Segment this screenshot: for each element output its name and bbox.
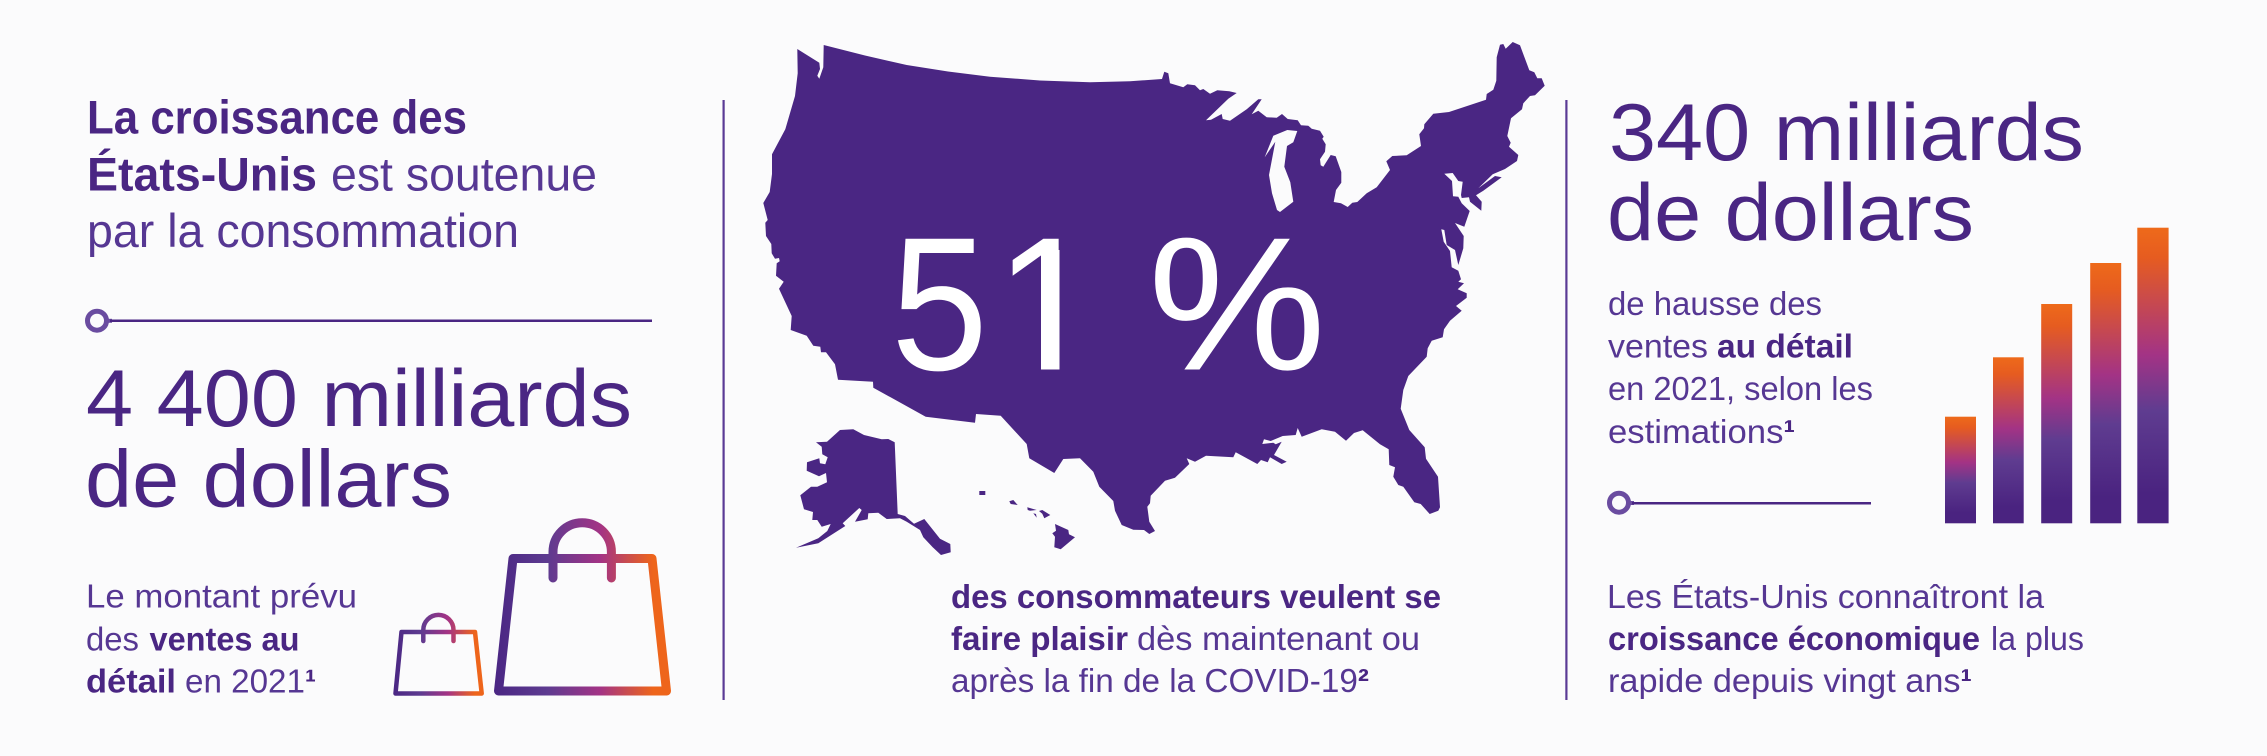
map: United States [763,42,1545,534]
icon: large shopping bag [498,523,666,691]
big number: 4 400 milliards de dollars [85,354,632,524]
text: hausse des ventes au détail: au détail [1717,328,1853,364]
heading: la croissance des États-Unis: est soutenue [331,148,597,200]
panel: right column [1607,88,2169,699]
big number: 340 milliards de dollars [1607,88,2084,258]
panel: centre map [763,42,1545,699]
text: consommateurs: après la fin de la COVID-19² [951,662,1369,699]
divider with ring marker [88,311,652,330]
map: Hawaii [979,491,1075,549]
text: montant prévu des ventes au détail: en 2021¹ [185,662,316,700]
divider with ring marker [1610,493,1871,512]
vertical rule left [722,100,725,700]
text: consommateurs: faire plaisir [951,620,1128,657]
bar chart: rising retail sales [1945,228,2169,523]
text: consommateurs [951,578,1441,699]
text: croissance économique [1607,578,2084,699]
text: consommateurs: des consommateurs veulent se [951,578,1441,615]
text: montant prévu des ventes au détail [86,578,357,700]
text: montant prévu des ventes au détail: Le montant prévu [86,578,357,614]
text: montant prévu des ventes au détail: détail [86,662,176,700]
big number: 4 400 milliards de dollars: de dollars [85,434,452,524]
text: montant prévu des ventes au détail: des [86,620,139,658]
text: croissance économique: Les États-Unis connaîtront la [1607,578,2045,615]
text: hausse des ventes au détail: en 2021, selon les [1608,370,1873,407]
text: consommateurs: dès maintenant ou [1137,620,1420,657]
text: montant prévu des ventes au détail: ventes au [150,620,300,658]
heading: la croissance des États-Unis [87,90,597,257]
panel: left column [85,90,666,700]
big number: 51 % [891,198,1326,410]
text: hausse des ventes au détail: de hausse des [1608,285,1822,322]
text: hausse des ventes au détail [1608,285,1873,450]
text: hausse des ventes au détail: estimations ¹ [1608,413,1795,450]
big number: 51 %: % [1148,198,1326,410]
icon: small shopping bag [396,615,482,694]
big number: 340 milliards de dollars: 340 milliards [1609,88,2084,178]
heading: la croissance des États-Unis: par la consommation [87,204,519,257]
text: hausse des ventes au détail: ventes [1608,328,1708,364]
big number: 340 milliards de dollars: de dollars [1607,168,1974,258]
text: croissance économique: croissance économique [1608,620,1980,657]
text: croissance économique: rapide depuis vingt ans ¹ [1608,662,1972,699]
big number: 51 %: 1 [994,198,1100,410]
big number: 4 400 milliards de dollars: 4 400 milliards [86,354,632,444]
big number: 51 %: 5 [891,198,988,410]
heading: la croissance des États-Unis: La croissance des [87,90,467,144]
heading: la croissance des États-Unis: États-Unis [87,148,317,200]
vertical rule right [1565,100,1568,700]
map: Alaska [796,429,951,555]
text: croissance économique: la plus [1991,620,2084,657]
